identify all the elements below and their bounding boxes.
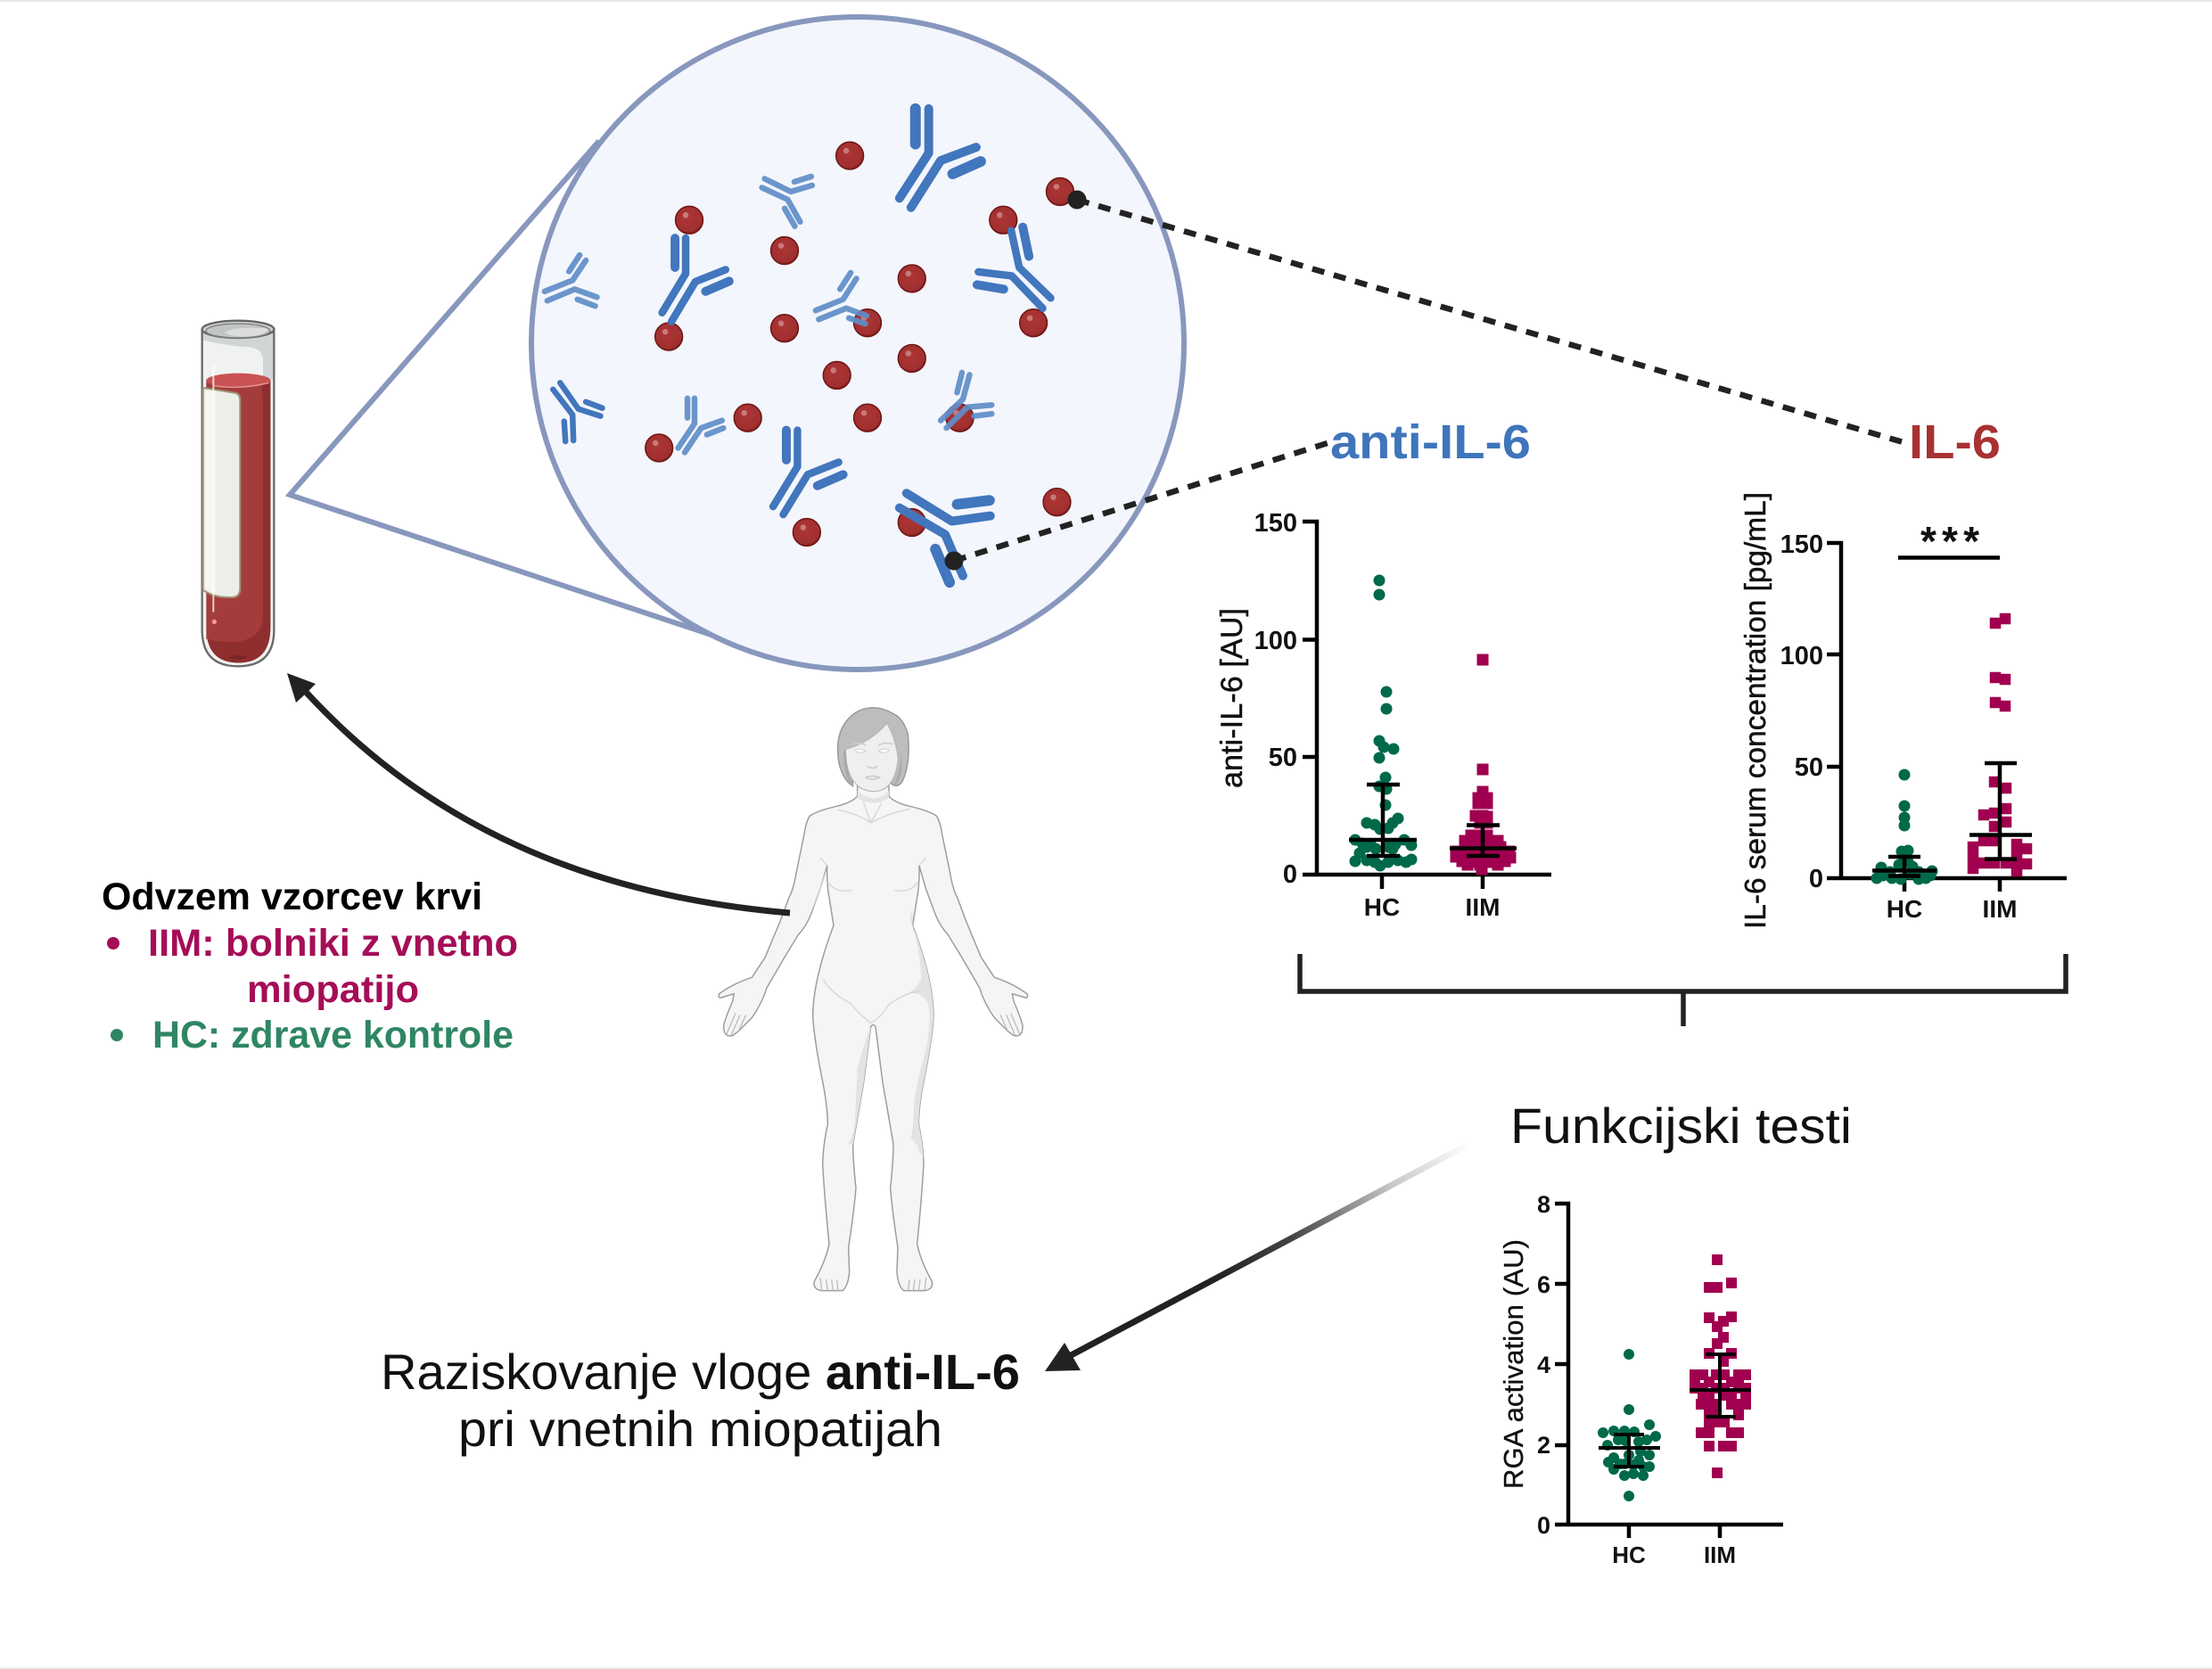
- anti-IL-6 antibodies, light: [545, 177, 991, 452]
- magnified blood circle: [531, 17, 1184, 670]
- legend: IIM: IIM: bolniki z vnetno: [148, 922, 518, 965]
- body shading: [811, 866, 933, 1164]
- chart: IL-6: 100: [1780, 642, 1823, 670]
- chart: anti-IL-6: [1215, 509, 1551, 921]
- legend: IIM: miopatijo: [247, 968, 419, 1011]
- error bars: [1599, 1354, 1751, 1467]
- conclusion text: Raziskovanje vloge anti-IL-6: [381, 1344, 1020, 1400]
- chart: IL-6: HC: [1887, 895, 1922, 923]
- chart: anti-IL-6: 50: [1269, 744, 1297, 772]
- chart: IL-6: 150: [1780, 530, 1823, 559]
- icon: human figure: [719, 708, 1028, 1291]
- text block: blood sampling: [102, 876, 518, 1056]
- chart: RGA activation: 8: [1537, 1191, 1550, 1218]
- chart: RGA activation: 6: [1537, 1271, 1550, 1298]
- text block: blood sampling: Odvzem vzorcev krvi: [102, 876, 482, 918]
- HC points: [1355, 580, 1411, 866]
- significance marker: [1898, 518, 2000, 564]
- IL-6 molecules: [646, 142, 1073, 546]
- chart: IL-6: [1739, 492, 2067, 929]
- dashed connector to IL-6: [1068, 191, 1906, 443]
- chart: anti-IL-6: 0: [1283, 860, 1297, 889]
- significance marker: ***: [1920, 518, 1979, 564]
- chart: RGA activation: HC: [1612, 1542, 1646, 1568]
- zoom cone lines: [290, 141, 730, 641]
- chart: IL-6: IIM: [1983, 895, 2017, 923]
- arrow: functional tests to conclusion: [1045, 1144, 1469, 1371]
- chart: anti-IL-6: HC: [1364, 893, 1400, 921]
- neck shade: [858, 791, 889, 803]
- conclusion text: pri vnetnih miopatijah: [458, 1401, 942, 1457]
- chart: RGA activation: [1498, 1191, 1783, 1568]
- chart: IL-6: 50: [1795, 753, 1823, 782]
- IIM points: [1695, 1260, 1746, 1473]
- dashed connector to anti-IL-6: [945, 442, 1330, 571]
- legend: IIM: [107, 922, 518, 1011]
- IIM points: [1456, 660, 1510, 869]
- chart: IL-6: IL-6 serum concentration [pg/mL]: [1739, 492, 1772, 929]
- chart: RGA activation: 0: [1537, 1512, 1550, 1539]
- chart: anti-IL-6: anti-IL-6 [AU]: [1215, 608, 1249, 788]
- arrow: patient to blood sample: [287, 673, 790, 913]
- chart: RGA activation: IIM: [1704, 1542, 1736, 1568]
- chart: anti-IL-6: IIM: [1466, 893, 1500, 921]
- chart: RGA activation: 4: [1537, 1352, 1550, 1378]
- error bars: [1872, 763, 2032, 876]
- HC points: [1603, 1354, 1656, 1496]
- icon: blood tube: [202, 321, 274, 666]
- body contour lines: [820, 802, 925, 1023]
- bracket grouping charts: [1300, 954, 2066, 1026]
- chart: anti-IL-6: 150: [1254, 509, 1297, 538]
- hair: [838, 708, 909, 786]
- anti-IL-6 antibodies, dark: [553, 109, 1050, 582]
- HC points: [1877, 775, 1932, 879]
- body outline: [719, 782, 1028, 1291]
- face: [845, 723, 898, 792]
- heading: anti-IL-6: anti-IL-6: [1330, 415, 1531, 469]
- heading: IL-6: IL-6: [1909, 415, 2001, 469]
- fingers and toes: [727, 1014, 1020, 1291]
- chart: IL-6: 0: [1809, 865, 1823, 893]
- chart: RGA activation: RGA activation (AU): [1498, 1239, 1529, 1489]
- IIM points: [1973, 619, 2027, 871]
- heading: functional tests: Funkcijski testi: [1510, 1098, 1852, 1154]
- chart: RGA activation: 2: [1537, 1432, 1550, 1459]
- conclusion text: [381, 1344, 1020, 1457]
- chart: anti-IL-6: 100: [1254, 627, 1297, 655]
- error bars: [1349, 785, 1517, 856]
- legend: HC: HC: zdrave kontrole: [152, 1014, 514, 1056]
